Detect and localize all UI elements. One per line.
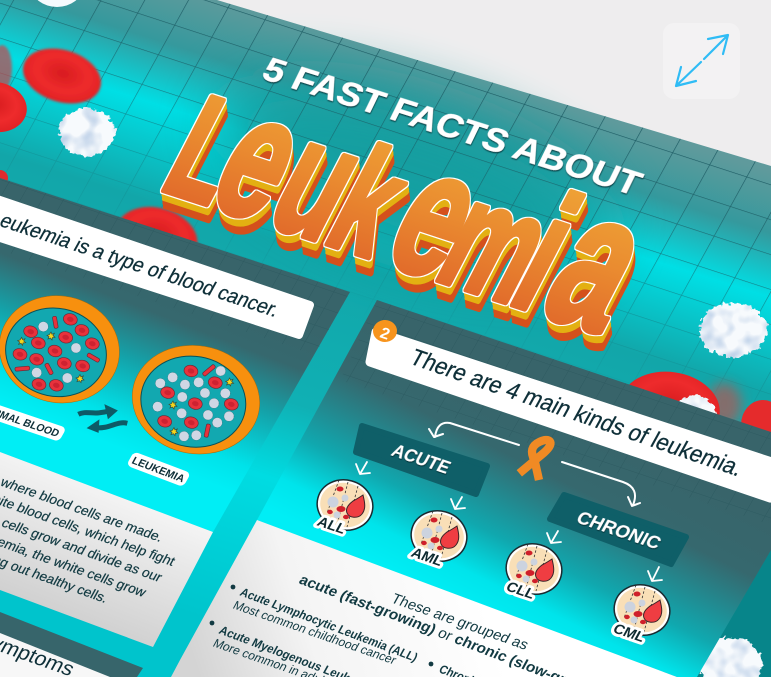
acute box bbox=[356, 426, 487, 494]
acute box: ACUTE bbox=[388, 441, 454, 478]
icon: ALL bbox=[311, 474, 379, 538]
bullet: ALL: Acute Lymphocytic Leukemia (ALL) bbox=[238, 585, 420, 664]
icon: orange ribbon bbox=[519, 440, 550, 480]
red cell blurred right bbox=[706, 383, 742, 427]
panel grid band bbox=[0, 178, 350, 355]
panel 3 header band bbox=[0, 612, 143, 677]
arrow to chronic bbox=[562, 462, 640, 506]
title: Leukemia 3D: u bbox=[246, 86, 393, 274]
grouping text: These are grouped as bbox=[388, 591, 531, 653]
chronic box: CHRONIC bbox=[573, 508, 665, 554]
panel 1: what is leukemia bbox=[0, 178, 350, 647]
title: Leukemia 3D: i bbox=[488, 161, 606, 345]
panel 3 heading bar bbox=[0, 633, 110, 677]
panel 2 card bbox=[171, 520, 677, 677]
heading text: There are 4 main kinds of leukemia. bbox=[405, 345, 748, 482]
icon: CML: CML bbox=[610, 622, 648, 646]
heading bar bbox=[0, 198, 310, 335]
title: Leukemia 3D bbox=[138, 28, 684, 371]
white cell bottom right bbox=[700, 637, 762, 677]
label: leukemia: LEUKEMIA bbox=[130, 455, 187, 485]
white cell top left bbox=[32, 0, 82, 7]
icon: CLL bbox=[500, 538, 568, 603]
panel 2: kinds of leukemia bbox=[171, 300, 771, 677]
icon: expand arrows bbox=[663, 23, 740, 99]
lower right dark area bbox=[660, 500, 771, 677]
number badge 2 bbox=[373, 320, 397, 344]
title: Leukemia 3D: e bbox=[186, 59, 336, 257]
white cell right bbox=[699, 303, 767, 357]
red cell far right bbox=[741, 400, 771, 450]
red cell blurred left bbox=[0, 45, 12, 91]
panel background bbox=[0, 178, 350, 532]
subtitle: 5 FAST FACTS ABOUT bbox=[256, 51, 648, 203]
icon: ALL: ALL bbox=[314, 515, 349, 538]
poster grid bbox=[0, 0, 771, 402]
icon: AML bbox=[405, 505, 473, 570]
white cell over red bbox=[674, 395, 716, 435]
panel 3: symptoms bbox=[0, 612, 143, 677]
panel grid band bbox=[340, 300, 771, 525]
arrow to acute bbox=[429, 423, 519, 445]
title: Leukemia 3D: k bbox=[305, 118, 434, 288]
number badge 2: 2 bbox=[378, 325, 392, 344]
title: Leukemia 3D: L bbox=[142, 65, 274, 235]
chronic box bbox=[550, 495, 686, 564]
title: Leukemia 3D: m bbox=[415, 149, 579, 335]
title: Leukemia 3D: e bbox=[361, 113, 515, 316]
bullet: ALL: Most common childhood cancer bbox=[231, 598, 399, 667]
panel 1 card bbox=[0, 452, 213, 647]
white cell left bbox=[59, 108, 115, 156]
blood comparison diagrams bbox=[0, 285, 268, 464]
panel background bbox=[257, 300, 771, 677]
circle: leukemia bbox=[124, 335, 268, 464]
red cell top bbox=[16, 39, 108, 113]
bullet list bbox=[210, 585, 626, 677]
poster title glow shade bbox=[197, 40, 633, 310]
red cell right bbox=[615, 365, 725, 451]
circle: normal blood bbox=[0, 285, 129, 414]
icon: CLL: CLL bbox=[503, 580, 538, 603]
red cell left bbox=[0, 77, 31, 137]
icon: AML: AML bbox=[408, 546, 446, 570]
heading bar bbox=[370, 332, 771, 498]
red cell small left bbox=[0, 170, 8, 186]
title: Leukemia 3D: a bbox=[517, 152, 684, 371]
red cell behind panel one bbox=[110, 198, 204, 274]
icon: swap arrows bbox=[78, 405, 127, 432]
arrows to subtype icons bbox=[356, 462, 662, 581]
icon: CML bbox=[608, 579, 676, 646]
